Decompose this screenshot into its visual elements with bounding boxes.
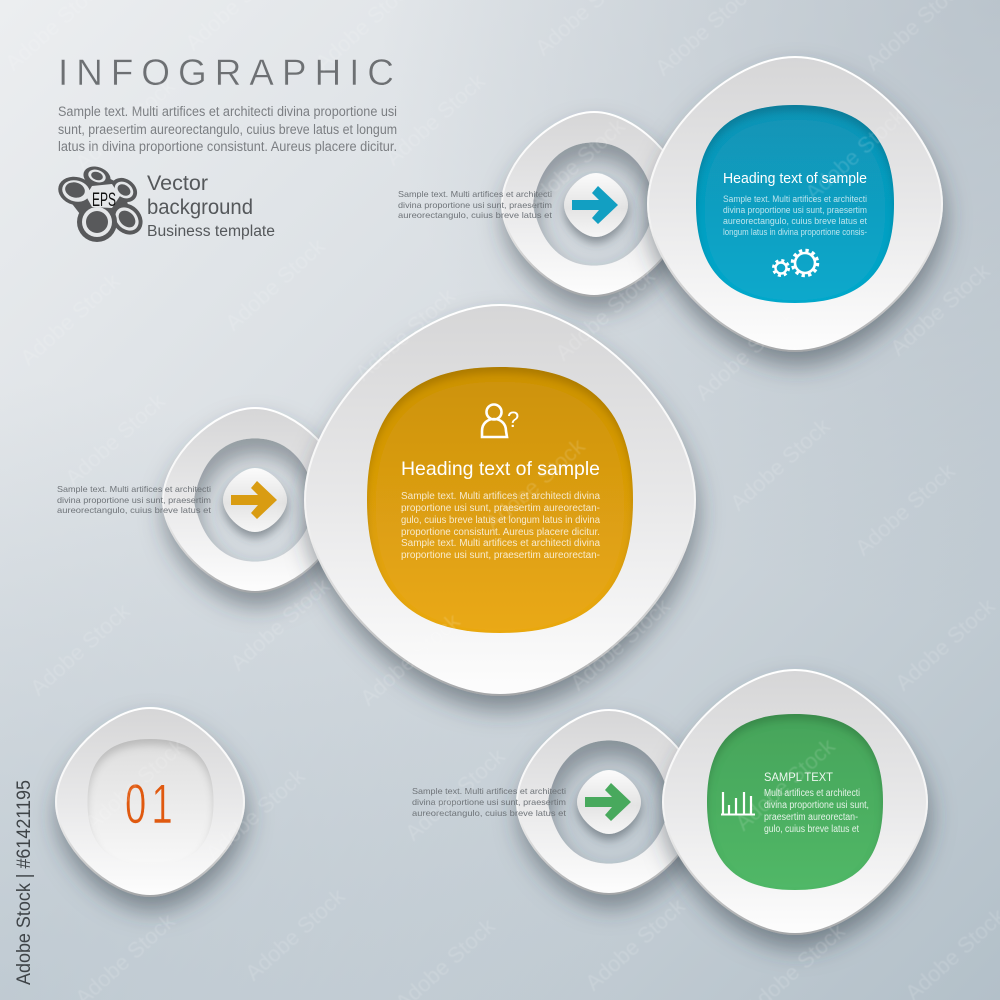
- logo caption: Vector: [147, 172, 208, 195]
- icon: bar chart: [721, 792, 755, 814]
- body text: blue: divina proportione usi sunt, praesertim: [723, 205, 867, 215]
- caption: orange: [57, 484, 212, 515]
- icon: person with question mark: [482, 404, 519, 437]
- caption: blue: divina proportione usi sunt, praesertim: [398, 200, 552, 210]
- watermark pattern: Adobe Stock: [350, 283, 460, 385]
- watermark pattern: Adobe Stock: [60, 388, 170, 490]
- body text: orange: Sample text. Multi artifices et architecti divina: [401, 538, 600, 549]
- watermark pattern: Adobe Stock: [730, 733, 840, 835]
- caption: blue: Sample text. Multi artifices et architecti: [398, 189, 552, 199]
- intro text block: sunt, praesertim aureorectangulo, cuius breve latus et longum: [58, 122, 397, 137]
- watermark pattern: Adobe Stock: [380, 68, 490, 170]
- content panel: blue: [696, 105, 894, 303]
- body text: blue: longum latus in divina proportione consis-: [723, 227, 867, 237]
- ring: number: [56, 708, 244, 896]
- caption: green: Sample text. Multi artifices et architecti: [412, 786, 566, 796]
- caption: orange: divina proportione usi sunt, praesertim: [57, 495, 211, 505]
- body text: green: praesertim aureorectan-: [764, 812, 858, 823]
- panel: green step: [412, 670, 927, 934]
- button: green arrow: [577, 770, 641, 834]
- logo caption: background: [147, 196, 253, 219]
- body text: orange: gulo, cuius breve latus et longum latus in divina: [401, 515, 600, 526]
- icon: gears: [774, 250, 818, 276]
- watermark pattern: Adobe Stock: [15, 268, 125, 370]
- watermark pattern: Adobe Stock: [200, 763, 310, 865]
- watermark pattern: Adobe Stock: [80, 733, 190, 835]
- body text: green: gulo, cuius breve latus et: [764, 824, 859, 835]
- caption: blue: [398, 189, 553, 220]
- icon: EPS logo: [55, 163, 149, 242]
- large ring: orange: [305, 305, 695, 695]
- stock id label: Adobe Stock | #61421195: [14, 780, 35, 985]
- body text: green: divina proportione usi sunt,: [764, 800, 869, 811]
- caption: green: [412, 786, 567, 818]
- watermark pattern: Adobe Stock: [25, 598, 135, 700]
- watermark pattern: Adobe Stock: [885, 258, 995, 360]
- body text: blue: Sample text. Multi artifices et architecti: [723, 194, 867, 204]
- heading: blue: Heading text of sample: [723, 171, 867, 187]
- intro text block: Sample text. Multi artifices et architecti divina proportione usi: [58, 104, 397, 119]
- body text: orange: proportione usi sunt, praesertim aureorectan-: [401, 550, 600, 561]
- body text: green: Multi artifices et architecti: [764, 788, 860, 799]
- watermark pattern: Adobe Stock: [850, 458, 960, 560]
- intro text block: latus in divina proportione consistunt. Aureus placere dicitur.: [58, 139, 397, 154]
- content panel: green: [707, 714, 883, 890]
- caption: orange: Sample text. Multi artifices et architecti: [57, 484, 211, 494]
- icon: EPS logo: EPS: [92, 190, 116, 211]
- intro text block: [58, 104, 397, 154]
- large ring: green: [663, 670, 927, 934]
- body text: blue: [723, 194, 867, 237]
- content panel: orange: [367, 367, 633, 633]
- caption: orange: aureorectangulo, cuius breve latus et: [57, 505, 212, 515]
- caption: green: aureorectangulo, cuius breve latus et: [412, 808, 567, 818]
- icon: person with question mark: ?: [507, 407, 519, 432]
- watermark pattern: Adobe Stock: [355, 608, 465, 710]
- watermark pattern: Adobe Stock: [225, 573, 335, 675]
- caption: blue: aureorectangulo, cuius breve latus et: [398, 210, 553, 220]
- small ring: orange: [163, 408, 347, 592]
- watermark pattern: Adobe Stock: [70, 73, 180, 175]
- watermark pattern: Adobe Stock: [580, 893, 690, 995]
- watermark pattern: Adobe Stock: [480, 433, 590, 535]
- panel: orange step: [57, 305, 695, 695]
- watermark pattern: Adobe Stock: [550, 263, 660, 365]
- watermark pattern: Adobe Stock: [725, 413, 835, 515]
- watermark pattern: Adobe Stock: [400, 743, 510, 845]
- watermark pattern: Adobe Stock: [220, 233, 330, 335]
- small ring: green: [517, 710, 701, 894]
- number: 01: [125, 774, 173, 836]
- logo caption: Business template: [147, 223, 275, 240]
- panel: blue step: [398, 57, 942, 351]
- body text: orange: Sample text. Multi artifices et architecti divina: [401, 491, 600, 502]
- button: orange arrow: [223, 468, 287, 532]
- heading: orange: Heading text of sample: [401, 458, 600, 480]
- body text: orange: proportione usi sunt, praesertim aureorectan-: [401, 503, 600, 514]
- watermark pattern: Adobe Stock: [800, 103, 910, 205]
- inset: number: [88, 739, 214, 865]
- large ring: blue: [648, 57, 942, 351]
- body text: orange: [401, 491, 600, 561]
- body text: orange: proportione consistunt. Aureus placere dicitur.: [401, 527, 600, 538]
- watermark pattern: Adobe Stock: [520, 113, 630, 215]
- watermark pattern: Adobe Stock: [565, 593, 675, 695]
- body text: blue: aureorectangulo, cuius breve latus et: [723, 216, 867, 226]
- body text: green: [764, 788, 869, 835]
- logo caption: [147, 172, 275, 240]
- watermark pattern: Adobe Stock: [240, 883, 350, 985]
- watermark pattern: Adobe Stock: [890, 593, 1000, 695]
- watermark pattern: Adobe Stock: [690, 303, 800, 405]
- title: INFOGRAPHIC: [58, 52, 394, 93]
- panel: number 01: [56, 708, 244, 896]
- caption: green: divina proportione usi sunt, praesertim: [412, 797, 566, 807]
- button: blue arrow: [564, 173, 628, 237]
- small ring: blue: [502, 112, 686, 296]
- heading: green: SAMPL TEXT: [764, 770, 834, 784]
